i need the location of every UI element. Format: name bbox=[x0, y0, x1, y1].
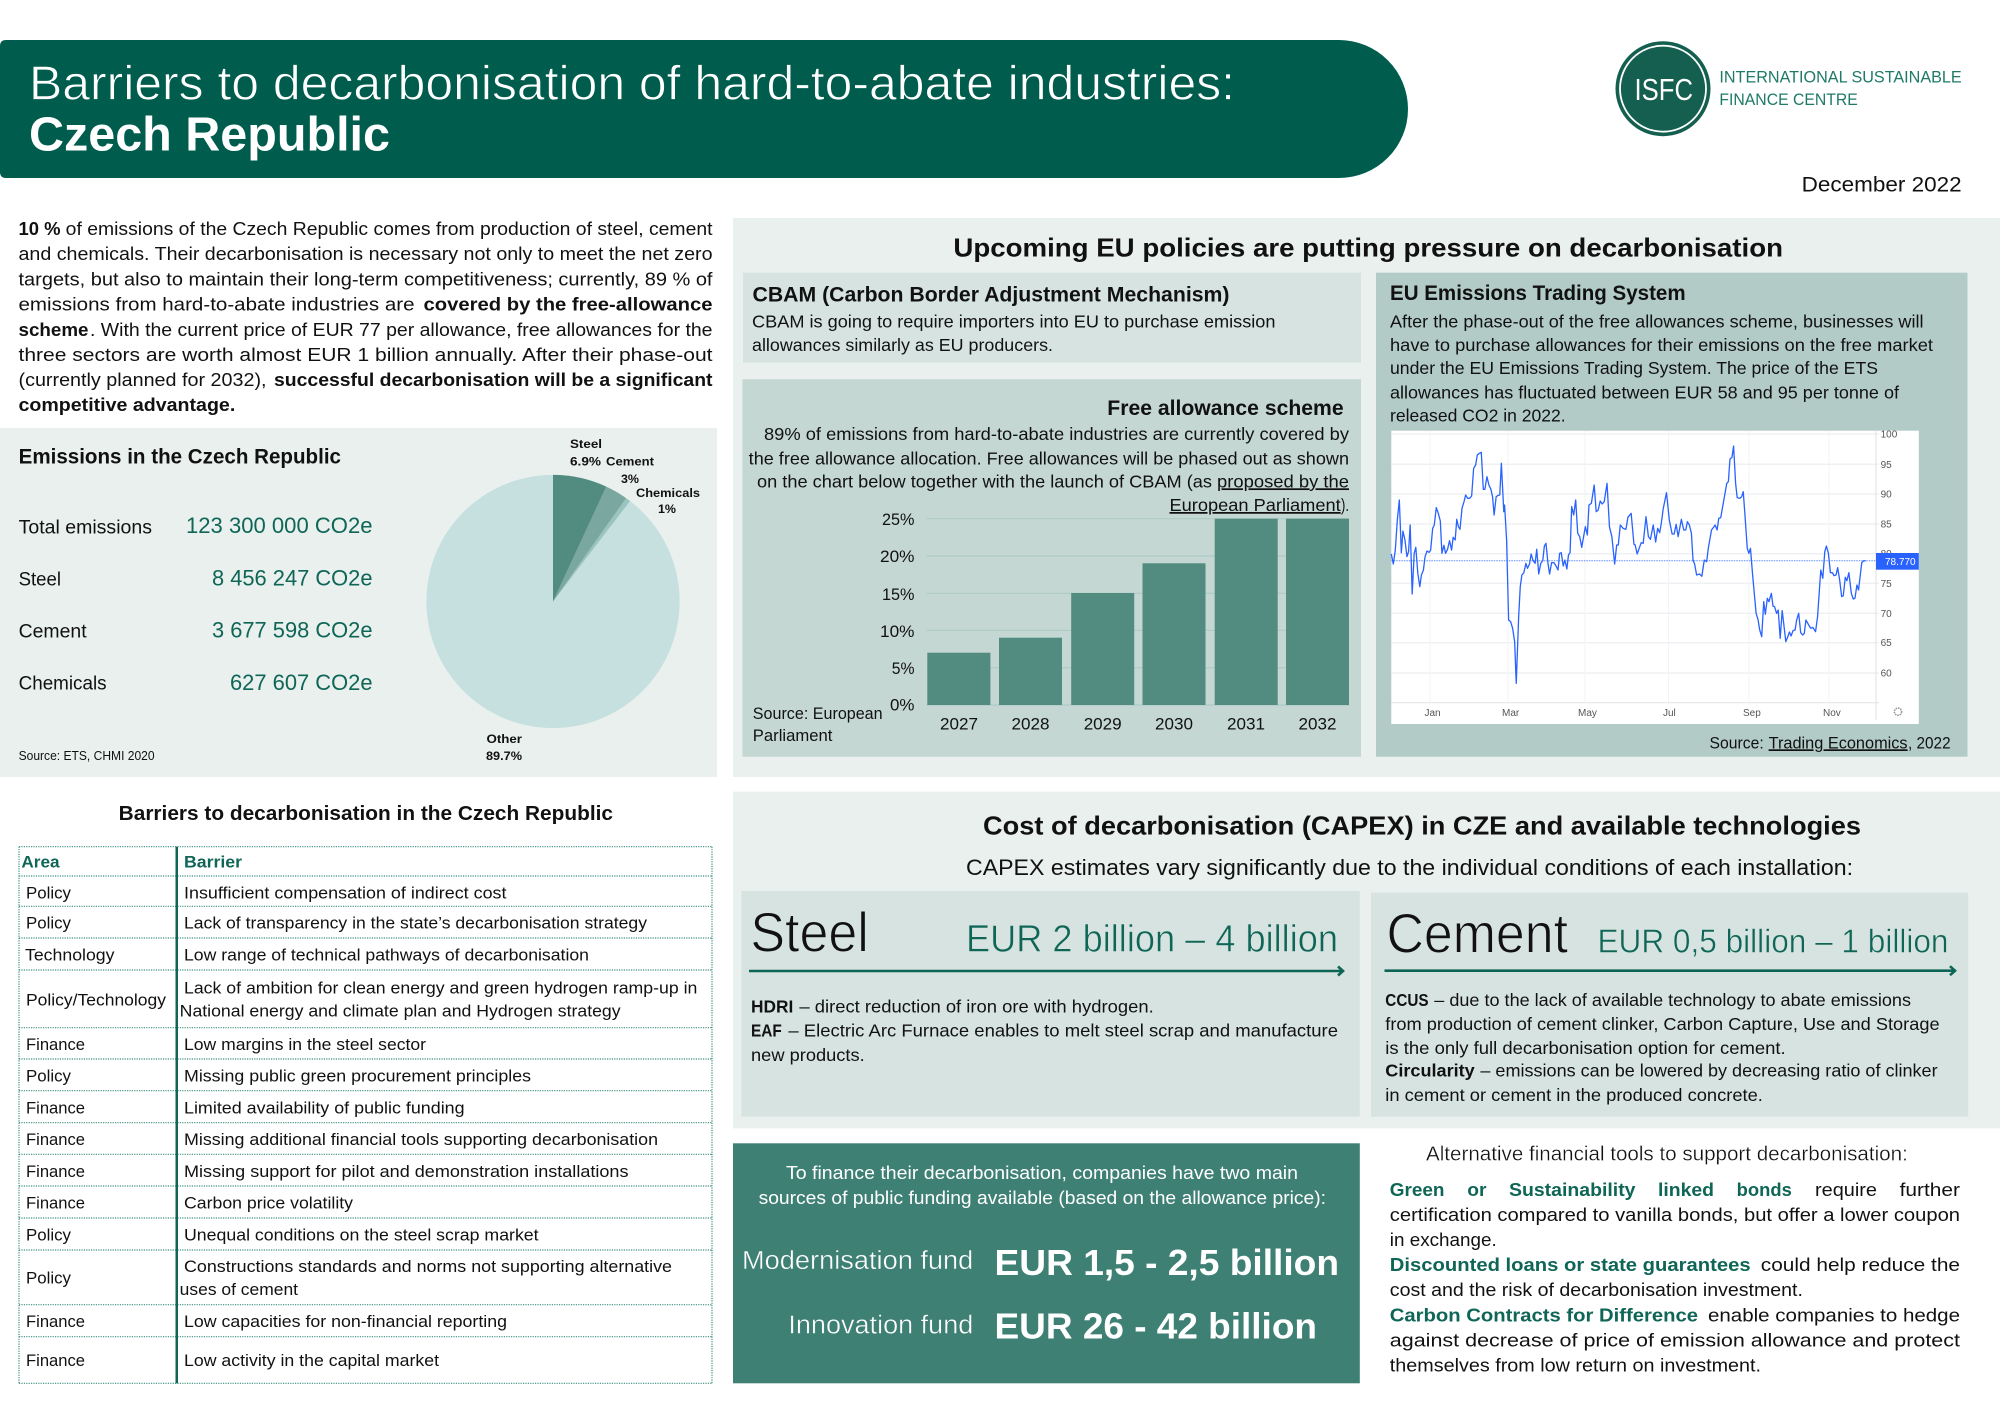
subheading: CAPEX estimates: CAPEX estimates vary significantly due to the individual conditions of each installation: bbox=[966, 855, 1853, 880]
panel: EU emissions trading system: released CO2 in 2022. bbox=[1390, 406, 1566, 426]
pie chart: Other bbox=[486, 732, 522, 746]
intro text block: 10 % bbox=[18, 219, 60, 239]
source: trading economics: , 2022 bbox=[1908, 733, 1951, 752]
intro text block: covered by the free-allowance bbox=[424, 294, 712, 314]
table rows: Limited availability of public funding bbox=[184, 1098, 465, 1117]
line chart: carbon price 2022: 85 bbox=[1881, 520, 1892, 530]
bar chart: free allowance phase-out: 5% bbox=[892, 659, 914, 678]
line chart: carbon price 2022: Jan bbox=[1424, 708, 1441, 719]
intro text block: and chemicals. Their decarbonisation is necessary not only to meet the net zero bbox=[18, 244, 712, 264]
bar chart: free allowance phase-out: 2028 bbox=[1012, 714, 1050, 733]
panel: cement: EUR 0,5 billion – 1 billion bbox=[1598, 923, 1948, 960]
bar chart: free allowance phase-out: 10% bbox=[880, 622, 914, 641]
pie chart: 6.9% bbox=[570, 455, 601, 469]
source: trading economics: Trading Economics bbox=[1769, 733, 1908, 752]
text block: alternative financial tools: cost and the risk of decarbonisation investment. bbox=[1390, 1280, 1803, 1300]
line chart: carbon price 2022: Sep bbox=[1743, 708, 1761, 719]
emissions figures: Cement bbox=[19, 622, 87, 643]
title line: Barriers to decarbonisation of hard-to-abate industries: bbox=[29, 58, 1235, 110]
table header: Area bbox=[21, 852, 60, 871]
table rows: Missing support for pilot and demonstration installations bbox=[184, 1162, 628, 1181]
panel: CBAM: CBAM is going to require importers into EU to purchase emission bbox=[752, 311, 1276, 331]
source: bar chart bbox=[753, 704, 883, 745]
source: trading economics bbox=[1710, 733, 1951, 752]
table rows: Lack of transparency in the state’s decarbonisation strategy bbox=[184, 913, 648, 932]
table rows: Missing public green procurement principles bbox=[184, 1066, 531, 1085]
line chart: carbon price 2022: 95 bbox=[1881, 460, 1892, 471]
table header bbox=[21, 852, 242, 871]
source: bar chart: Source: European bbox=[753, 704, 883, 723]
emissions figures: 3 677 598 CO2e bbox=[212, 618, 372, 643]
modernisation fund: Modernisation fund bbox=[742, 1247, 973, 1275]
panel: cement: – emissions can be lowered by decreasing ratio of clinker bbox=[1480, 1061, 1938, 1081]
text block: alternative financial tools: Green bbox=[1390, 1180, 1444, 1200]
table rows: Finance bbox=[26, 1351, 85, 1370]
table rows: Finance bbox=[26, 1312, 85, 1331]
line chart: carbon price 2022: 80 bbox=[1881, 549, 1892, 560]
modernisation fund: EUR 1,5 - 2,5 billion bbox=[994, 1242, 1339, 1283]
emissions figures: 123 300 000 CO2e bbox=[186, 513, 372, 538]
modernisation fund bbox=[742, 1242, 1339, 1283]
panel: free allowance scheme: the free allowance allocation. Free allowances will be phased out as shown bbox=[749, 448, 1349, 468]
heading: alternative financial tools: Alternative financial tools to support decarbonisation: bbox=[1426, 1144, 1908, 1166]
bar chart: free allowance phase-out: 15% bbox=[882, 585, 914, 604]
intro text block: successful decarbonisation will be a significant bbox=[274, 370, 713, 390]
line chart: carbon price 2022: 90 bbox=[1881, 490, 1892, 500]
table rows: Low activity in the capital market bbox=[184, 1351, 439, 1370]
table rows: Policy bbox=[26, 883, 71, 902]
table rows: Low range of technical pathways of decarbonisation bbox=[184, 945, 589, 964]
panel: steel: – direct reduction of iron ore with hydrogen. bbox=[799, 997, 1154, 1017]
logo: ISFC: FINANCE CENTRE bbox=[1719, 90, 1858, 109]
emissions figures: Total emissions bbox=[19, 517, 152, 538]
text block: alternative financial tools: against decrease of price of emission allowance and protect bbox=[1390, 1331, 1960, 1351]
intro text block: . With the current price of EUR 77 per allowance, free allowances for the bbox=[90, 320, 712, 340]
bar chart: free allowance phase-out: 2029 bbox=[1084, 714, 1122, 733]
line chart: carbon price 2022: 70 bbox=[1881, 609, 1892, 620]
text block: alternative financial tools: certification compared to vanilla bonds, but offer a lower coupon bbox=[1390, 1205, 1960, 1225]
emissions figures: Chemicals bbox=[19, 673, 107, 694]
panel: steel: HDRI bbox=[751, 997, 793, 1017]
table rows: Constructions standards and norms not supporting alternative bbox=[184, 1257, 672, 1276]
line chart: carbon price 2022: May bbox=[1578, 708, 1597, 719]
innovation fund: EUR 26 - 42 billion bbox=[994, 1305, 1317, 1346]
text block: alternative financial tools: linked bbox=[1658, 1180, 1714, 1200]
panel: steel: Steel bbox=[750, 901, 869, 964]
table rows: Low capacities for non-financial reporting bbox=[184, 1312, 507, 1331]
line chart: carbon price 2022: 100 bbox=[1881, 430, 1898, 440]
line chart: carbon price 2022: 75 bbox=[1881, 579, 1892, 590]
emissions figures: 8 456 247 CO2e bbox=[212, 566, 372, 591]
source: bar chart: Parliament bbox=[753, 726, 833, 745]
bar chart: free allowance phase-out: 2030 bbox=[1155, 714, 1193, 733]
text block: alternative financial tools: could help reduce the bbox=[1761, 1255, 1960, 1275]
panel: steel: new products. bbox=[751, 1045, 865, 1065]
table rows: Finance bbox=[26, 1193, 85, 1212]
source: emissions: Source: ETS, CHMI 2020 bbox=[19, 748, 155, 763]
panel: EU emissions trading system: After the phase-out of the free allowances scheme, businesses will bbox=[1390, 311, 1924, 331]
panel: cement bbox=[1371, 893, 1968, 1117]
bar chart: free allowance phase-out: 25% bbox=[882, 510, 914, 529]
table rows: Finance bbox=[26, 1130, 85, 1149]
title banner bbox=[0, 40, 1408, 178]
intro text block: targets, but also to maintain their long-term competitiveness; currently, 89 % of bbox=[18, 270, 714, 290]
bar chart: free allowance phase-out bbox=[880, 510, 1349, 733]
bar chart: free allowance phase-out: 2032 bbox=[1298, 714, 1336, 733]
logo: ISFC: ISFC bbox=[1634, 72, 1693, 107]
pie chart: Chemicals bbox=[636, 486, 700, 500]
table rows: Policy bbox=[26, 1268, 71, 1287]
panel: public funding bbox=[733, 1143, 1360, 1383]
panel: cement: Circularity bbox=[1385, 1061, 1475, 1081]
line chart: carbon price 2022: 65 bbox=[1881, 638, 1892, 649]
panel: CBAM: allowances similarly as EU producers. bbox=[752, 335, 1053, 355]
pie chart bbox=[426, 437, 700, 763]
panel: upcoming EU policies bbox=[733, 218, 2000, 777]
text block: alternative financial tools: Discounted loans or state guarantees bbox=[1390, 1255, 1751, 1275]
panel: cement: – due to the lack of available technology to abate emissions bbox=[1434, 990, 1911, 1010]
bar chart: free allowance phase-out: 0% bbox=[890, 696, 914, 715]
arrow: steel bbox=[749, 966, 1343, 976]
text block: alternative financial tools: require bbox=[1815, 1180, 1877, 1200]
emissions figures: Steel bbox=[19, 570, 61, 591]
panel: steel bbox=[741, 891, 1360, 1117]
table rows: Technology bbox=[25, 945, 115, 964]
bar chart: free allowance phase-out: 2027 bbox=[940, 714, 978, 733]
line chart: carbon price 2022: Nov bbox=[1823, 708, 1841, 719]
panel: cement: is the only full decarbonisation option for cement. bbox=[1385, 1038, 1786, 1058]
intro text block: (currently planned for 2032), bbox=[18, 370, 266, 390]
intro text block: competitive advantage. bbox=[18, 395, 235, 415]
panel: EU emissions trading system bbox=[1376, 273, 1968, 757]
heading: barriers: Barriers to decarbonisation in the Czech Republic bbox=[119, 803, 613, 825]
pie chart: 1% bbox=[658, 502, 676, 516]
line chart: carbon price 2022: 78.770 bbox=[1885, 557, 1916, 568]
intro text block: emissions from hard-to-abate industries are bbox=[18, 294, 414, 314]
table rows: Lack of ambition for clean energy and green hydrogen ramp-up in bbox=[184, 978, 697, 997]
panel: steel: EUR 2 billion – 4 billion bbox=[966, 919, 1338, 961]
panel: cost of decarbonisation bbox=[733, 792, 2000, 1128]
panel: EU emissions trading system: under the EU Emissions Trading System. The price of the ETS bbox=[1390, 358, 1878, 378]
logo: ISFC bbox=[1616, 41, 1962, 136]
panel: cement: Cement bbox=[1386, 902, 1568, 965]
text block: alternative financial tools: or bbox=[1467, 1180, 1486, 1200]
text block: alternative financial tools: enable companies to hedge bbox=[1708, 1306, 1960, 1326]
table rows: Unequal conditions on the steel scrap market bbox=[184, 1225, 539, 1244]
line chart: carbon price 2022: Mar bbox=[1502, 708, 1520, 719]
table rows bbox=[25, 883, 697, 1370]
text block: alternative financial tools bbox=[1390, 1180, 1960, 1376]
panel: steel: – Electric Arc Furnace enables to melt steel scrap and manufacture bbox=[788, 1021, 1338, 1041]
text block: alternative financial tools: bonds bbox=[1737, 1180, 1792, 1200]
table rows: Finance bbox=[26, 1098, 85, 1117]
table rows: Policy bbox=[26, 913, 71, 932]
intro text block: three sectors are worth almost EUR 1 billion annually. After their phase-out bbox=[18, 345, 712, 365]
panel: free allowance scheme: on the chart below together with the launch of CBAM (as bbox=[757, 471, 1212, 491]
intro text block: scheme bbox=[18, 320, 88, 340]
innovation fund bbox=[788, 1305, 1317, 1346]
logo: ISFC: INTERNATIONAL SUSTAINABLE bbox=[1719, 67, 1962, 86]
pie chart: Steel bbox=[570, 437, 602, 451]
emissions figures: 627 607 CO2e bbox=[230, 670, 372, 695]
heading: upcoming EU policies: Upcoming EU policies are putting pressure on decarbonisation bbox=[953, 232, 1783, 262]
table rows: Policy bbox=[26, 1066, 71, 1085]
bar chart: free allowance phase-out: 20% bbox=[880, 547, 914, 566]
date: December 2022 bbox=[1802, 174, 1962, 197]
panel: public funding: sources of public funding available (based on the allowance price): bbox=[759, 1187, 1326, 1208]
table rows: Policy bbox=[26, 1225, 71, 1244]
panel: steel: EAF bbox=[751, 1021, 782, 1041]
arrow: cement bbox=[1384, 966, 1955, 975]
table rows: National energy and climate plan and Hydrogen strategy bbox=[180, 1001, 621, 1020]
bar chart: free allowance phase-out: 2031 bbox=[1227, 714, 1265, 733]
heading: cost of decarbonisation: Cost of decarbonisation (CAPEX) in CZE and available technologies bbox=[983, 810, 1861, 840]
text block: alternative financial tools: in exchange. bbox=[1390, 1230, 1497, 1250]
panel: EU emissions trading system: have to purchase allowances for their emissions on the free market bbox=[1390, 335, 1933, 355]
intro text block bbox=[18, 219, 714, 415]
panel: free allowance scheme: ). bbox=[1341, 495, 1349, 515]
panel: free allowance scheme: Free allowance scheme bbox=[1107, 397, 1344, 420]
pie chart: 3% bbox=[621, 472, 639, 486]
panel: free allowance scheme: 89% of emissions from hard-to-abate industries are currently covered by bbox=[764, 424, 1349, 444]
innovation fund: Innovation fund bbox=[788, 1312, 973, 1340]
emissions figures bbox=[19, 513, 372, 695]
panel: EU emissions trading system: EU Emissions Trading System bbox=[1390, 282, 1686, 305]
table rows: Insufficient compensation of indirect cost bbox=[184, 883, 507, 902]
panel: emissions in the Czech Republic bbox=[0, 428, 717, 777]
table rows: Carbon price volatility bbox=[184, 1193, 354, 1212]
heading: emissions: Emissions in the Czech Republic bbox=[19, 445, 341, 468]
line chart: carbon price 2022: Jul bbox=[1663, 708, 1676, 719]
table rows: uses of cement bbox=[180, 1280, 298, 1299]
table rows: Policy/Technology bbox=[26, 990, 167, 1009]
intro text block: of emissions of the Czech Republic comes from production of steel, cement bbox=[66, 219, 712, 239]
line chart: carbon price 2022: 60 bbox=[1881, 668, 1892, 680]
source: trading economics: Source: bbox=[1710, 733, 1764, 752]
table rows: Low margins in the steel sector bbox=[184, 1035, 426, 1054]
panel: free allowance scheme: proposed by the bbox=[1217, 471, 1349, 491]
panel: EU emissions trading system: allowances has fluctuated between EUR 58 and 95 per tonne of bbox=[1390, 382, 1899, 402]
table rows: Finance bbox=[26, 1162, 85, 1181]
table rows: Finance bbox=[26, 1035, 85, 1054]
panel: CBAM: CBAM (Carbon Border Adjustment Mechanism) bbox=[752, 284, 1230, 307]
panel: cement: from production of cement clinker, Carbon Capture, Use and Storage bbox=[1385, 1014, 1940, 1034]
table header: Barrier bbox=[184, 852, 242, 871]
panel: cement: CCUS bbox=[1385, 990, 1429, 1010]
text block: alternative financial tools: further bbox=[1900, 1180, 1960, 1200]
panel: cement: in cement or cement in the produced concrete. bbox=[1385, 1085, 1763, 1105]
pie chart: 89.7% bbox=[486, 749, 522, 763]
panel: free allowance scheme bbox=[742, 379, 1361, 757]
panel: CBAM bbox=[743, 273, 1361, 363]
line chart: carbon price 2022 bbox=[1391, 430, 1919, 724]
panel: public funding: To finance their decarbonisation, companies have two main bbox=[786, 1162, 1298, 1183]
country name: Czech Republic bbox=[29, 108, 390, 162]
panel: free allowance scheme: European Parliament bbox=[1170, 495, 1341, 515]
pie chart: Cement bbox=[606, 455, 654, 469]
table: barriers bbox=[19, 847, 712, 1383]
text block: alternative financial tools: Sustainability bbox=[1509, 1180, 1636, 1200]
text block: alternative financial tools: Carbon Contracts for Difference bbox=[1390, 1306, 1698, 1326]
table rows: Missing additional financial tools supporting decarbonisation bbox=[184, 1130, 658, 1149]
text block: alternative financial tools: themselves from low return on investment. bbox=[1390, 1356, 1761, 1376]
